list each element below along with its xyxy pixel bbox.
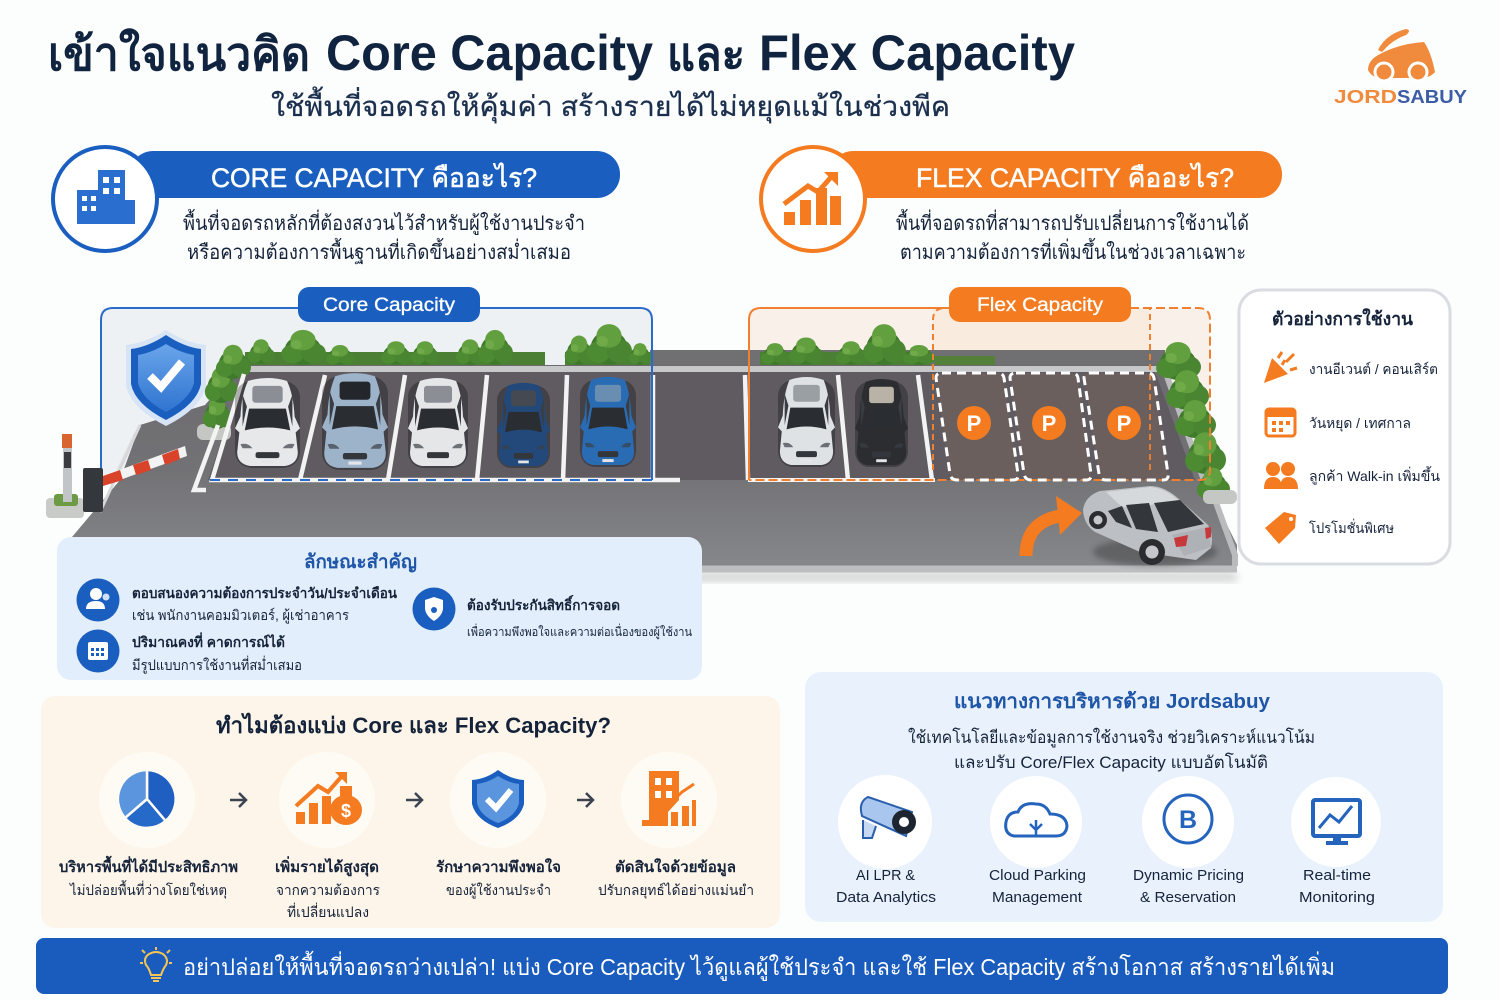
item: maximize revenue: เพิ่มรายได้สูงสุด xyxy=(275,856,379,877)
title: Flex Capacity xyxy=(759,25,1075,81)
icon: calendar xyxy=(1266,409,1295,436)
panel: key characteristics: ต้องรับประกันสิทธิ์การจอด xyxy=(467,594,620,613)
parked cars: core xyxy=(235,373,636,470)
icon: guaranteed shield xyxy=(412,588,456,630)
title: และ xyxy=(667,28,745,80)
item: maximize revenue xyxy=(275,752,380,920)
title xyxy=(48,25,1075,81)
item: keep satisfaction xyxy=(436,752,561,899)
panel: key characteristics: ตอบสนองความต้องการประจำวัน/ประจำเดือน xyxy=(132,585,397,601)
panel: key characteristics: เพื่อความพึงพอใจและความต่อเนื่องของผู้ใช้งาน xyxy=(467,623,692,640)
item: keep satisfaction: รักษาความพึงพอใจ xyxy=(436,858,561,876)
panel: jordsabuy management xyxy=(805,672,1443,922)
capacity zone tint xyxy=(101,308,1210,480)
item: data-driven decisions xyxy=(598,752,754,899)
panel: why split core and flex xyxy=(41,696,780,928)
item: efficient use: ไม่ปล่อยพื้นที่ว่างโดยใช่เหตุ xyxy=(69,880,227,899)
panel: usage examples: งานอีเวนต์ / คอนเสิร์ต xyxy=(1309,361,1438,377)
panel: flex capacity definition: FLEX CAPACITY คืออะไร? xyxy=(916,163,1234,193)
panel: jordsabuy management: แนวทางการบริหารด้วย Jordsabuy xyxy=(954,690,1271,713)
icon: users xyxy=(76,578,120,622)
item: cloud parking: Cloud Parking xyxy=(989,867,1086,884)
panel: usage examples xyxy=(1239,290,1450,564)
item: real-time monitoring: Real-time xyxy=(1303,867,1371,884)
item: AI LPR: Data Analytics xyxy=(836,889,936,906)
icon: party popper xyxy=(1264,352,1297,383)
icon: rising bars xyxy=(761,147,865,251)
label: core capacity: Core Capacity xyxy=(323,295,456,316)
item: cloud parking: Management xyxy=(992,889,1083,906)
label: flex capacity xyxy=(949,287,1131,322)
panel: core capacity definition: หรือความต้องการพื้นฐานที่เกิดขึ้นอย่างสม่ำเสมอ xyxy=(187,238,571,264)
icon: people xyxy=(1264,462,1298,489)
item: maximize revenue: จากความต้องการ xyxy=(276,882,380,898)
panel: jordsabuy management: ใช้เทคโนโลยีและข้อมูลการใช้งานจริง ช่วยวิเคราะห์แนวโน้ม xyxy=(908,727,1315,748)
subtitle: ใช้พื้นที่จอดรถให้คุ้มค่า สร้างรายได้ไม่หยุดแม้ในช่วงพีค xyxy=(271,86,950,124)
P markers: P xyxy=(1117,411,1131,436)
panel: why split core and flex: ทำไมต้องแบ่ง Core และ Flex Capacity? xyxy=(216,712,611,738)
panel: key characteristics: ลักษณะสำคัญ xyxy=(304,552,417,573)
panel: usage examples: ลูกค้า Walk-in เพิ่มขึ้น xyxy=(1309,466,1440,485)
shield icon xyxy=(126,330,206,426)
core capacity zone frame xyxy=(101,308,652,480)
icon: buildings xyxy=(53,147,157,251)
icon: light bulb xyxy=(140,947,172,981)
item: cloud parking xyxy=(989,776,1086,906)
item: real-time monitoring xyxy=(1291,777,1381,906)
panel: core capacity definition: พื้นที่จอดรถหลักที่ต้องสงวนไว้สำหรับผู้ใช้งานประจำ xyxy=(183,209,585,236)
bottom banner: อย่าปล่อยให้พื้นที่จอดรถว่างเปล่า! แบ่ง Core Capacity ไว้ดูแลผู้ใช้ประจำ และใช้ Flex Capacity สร้างโอกาส สร้างรายได้เพิ่ม xyxy=(183,951,1335,981)
item: dynamic pricing: B xyxy=(1179,806,1197,834)
item: keep satisfaction: ของผู้ใช้งานประจำ xyxy=(446,882,551,899)
entering car xyxy=(1083,486,1217,566)
bottom banner xyxy=(36,938,1448,994)
P markers: P xyxy=(1042,411,1056,436)
parked cars: flex xyxy=(778,377,908,467)
panel: jordsabuy management: และปรับ Core/Flex Capacity แบบอัตโนมัติ xyxy=(954,752,1268,772)
arrow xyxy=(577,793,593,807)
arrow xyxy=(406,793,422,807)
parking lot illustration xyxy=(46,308,1237,582)
P markers xyxy=(957,406,1141,440)
item: AI LPR xyxy=(836,775,936,906)
item: data-driven decisions: ตัดสินใจด้วยข้อมูล xyxy=(615,858,736,877)
panel: key characteristics xyxy=(57,537,702,680)
item: dynamic pricing: & Reservation xyxy=(1140,889,1236,906)
icon: calendar xyxy=(76,630,120,672)
item: real-time monitoring: Monitoring xyxy=(1299,889,1375,906)
panel: key characteristics: เช่น พนักงานคอมมิวเตอร์, ผู้เช่าอาคาร xyxy=(132,607,349,624)
logo: Jordsabuy: SABUY xyxy=(1397,87,1467,107)
item: efficient use: บริหารพื้นที่ได้มีประสิทธิภาพ xyxy=(59,855,238,876)
flex capacity zone frame xyxy=(749,308,1210,480)
entry barrier xyxy=(46,434,187,518)
parking bay lines xyxy=(194,374,935,490)
title: Core Capacity xyxy=(326,25,653,81)
panel: flex capacity definition: ตามความต้องการที่เพิ่มขึ้นในช่วงเวลาเฉพาะ xyxy=(900,238,1246,264)
panel: usage examples: ตัวอย่างการใช้งาน xyxy=(1272,308,1414,329)
title: เข้าใจแนวคิด xyxy=(48,27,310,80)
item: dynamic pricing: Dynamic Pricing xyxy=(1133,867,1244,884)
asphalt ground xyxy=(58,350,1237,582)
arrow: entering flex zone xyxy=(1026,496,1082,556)
panel: key characteristics: มีรูปแบบการใช้งานที่สม่ำเสมอ xyxy=(132,656,302,674)
trees and hedges xyxy=(197,324,1237,504)
item: dynamic pricing xyxy=(1133,776,1244,906)
item: maximize revenue: ที่เปลี่ยนแปลง xyxy=(287,903,369,920)
panel: key characteristics: ปริมาณคงที่ คาดการณ์ได้ xyxy=(132,632,285,650)
item: AI LPR: AI LPR & xyxy=(856,867,915,884)
panel: usage examples: โปรโมชั่นพิเศษ xyxy=(1309,519,1394,536)
item: data-driven decisions: ปรับกลยุทธ์ได้อย่างแม่นยำ xyxy=(598,882,754,899)
label: core capacity xyxy=(298,287,480,322)
flex parking stalls xyxy=(936,373,1168,480)
panel: usage examples: วันหยุด / เทศกาล xyxy=(1309,415,1411,432)
logo: Jordsabuy xyxy=(1334,29,1467,107)
item: maximize revenue: $ xyxy=(341,801,351,821)
item: efficient use xyxy=(59,752,238,899)
panel: flex capacity definition: พื้นที่จอดรถที่สามารถปรับเปลี่ยนการใช้งานได้ xyxy=(896,209,1249,235)
icon: price tag xyxy=(1265,512,1296,544)
arrow xyxy=(230,793,246,807)
panel: flex capacity definition xyxy=(761,147,1282,264)
panel: core capacity definition xyxy=(53,147,620,264)
P markers: P xyxy=(967,411,981,436)
label: flex capacity: Flex Capacity xyxy=(977,295,1104,316)
panel: core capacity definition: CORE CAPACITY คืออะไร? xyxy=(211,163,537,193)
logo: Jordsabuy: JORD xyxy=(1334,87,1397,107)
